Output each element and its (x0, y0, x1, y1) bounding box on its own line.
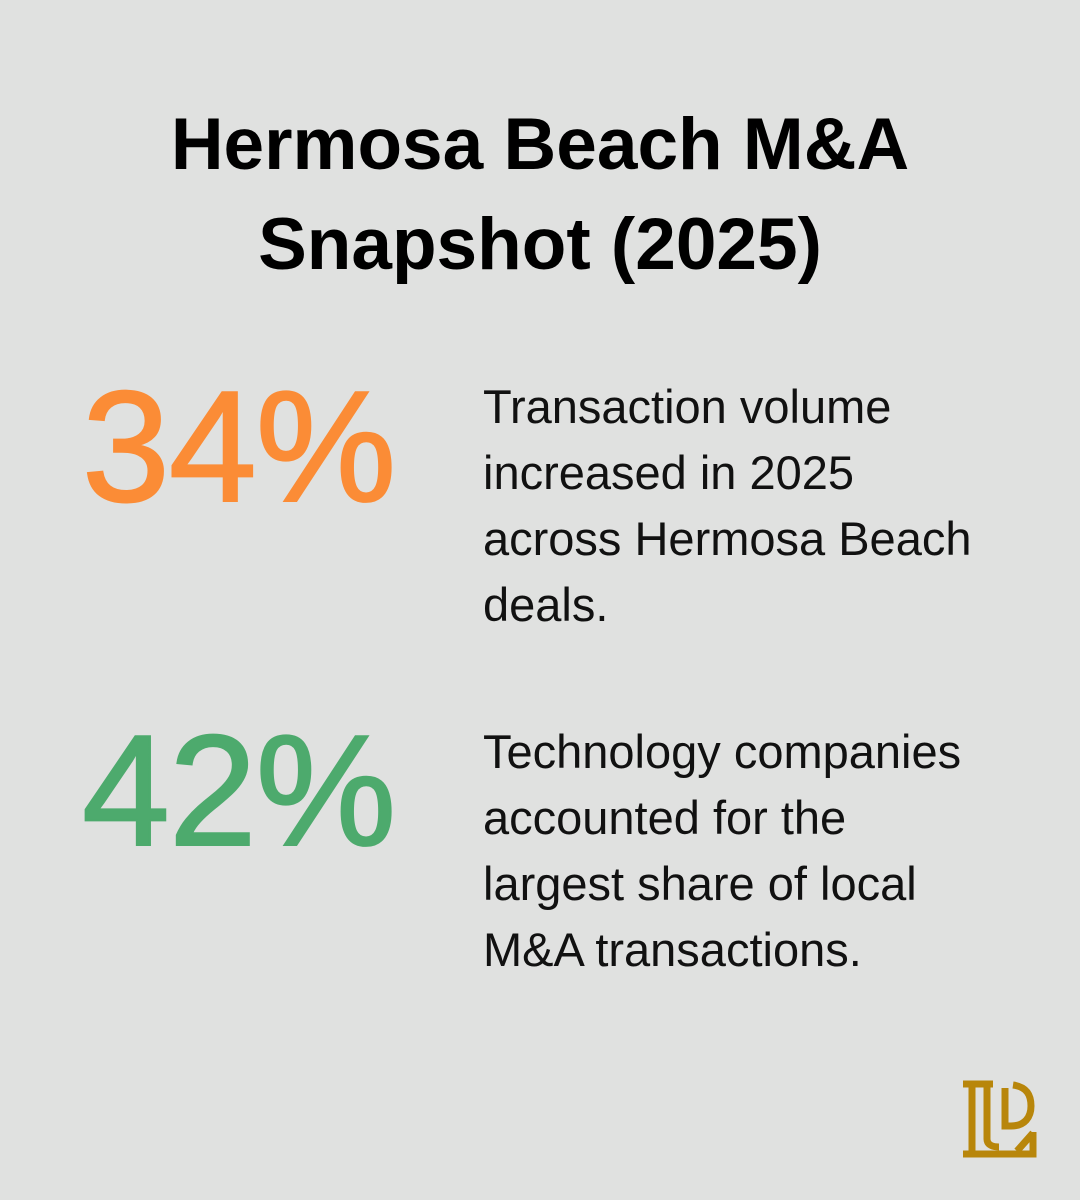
stat: 34%: 34% (82, 359, 395, 535)
text: transaction volume: increased in 2025 (483, 446, 854, 499)
text: technology companies: largest share of local (483, 857, 917, 910)
text: transaction volume: Transaction volume (483, 380, 891, 433)
text: transaction volume (483, 380, 971, 631)
stat: 42%: 42% (82, 703, 395, 879)
text: technology companies: Technology companies (483, 725, 961, 778)
text: transaction volume: across Hermosa Beach (483, 512, 971, 565)
title (171, 104, 909, 285)
text: technology companies (483, 725, 961, 976)
text: technology companies: accounted for the (483, 791, 846, 844)
title: Hermosa Beach M&A (171, 104, 909, 185)
text: transaction volume: deals. (483, 578, 608, 631)
icon: logo (963, 1080, 1036, 1158)
text: technology companies: M&A transactions. (483, 923, 862, 976)
title: Snapshot (2025) (258, 204, 822, 285)
